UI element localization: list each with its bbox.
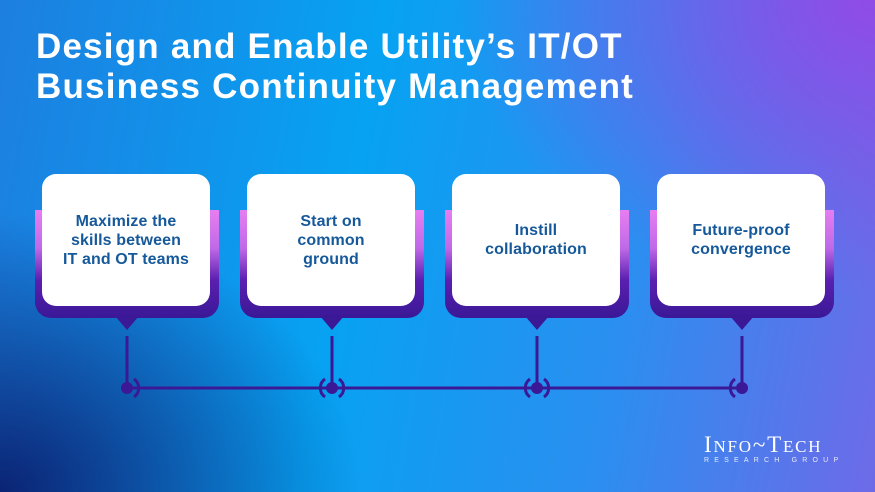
card text 4 [657,174,825,306]
card text 2: ground [303,250,359,268]
card text 1: IT and OT teams [63,250,189,268]
card text 3 [452,174,620,306]
logo: INFO~TECH [704,432,822,457]
logo: RESEARCH GROUP [704,457,843,464]
card 4 [650,174,834,330]
card text 1: Maximize the [76,212,176,230]
card text 4: convergence [691,241,791,258]
card 3 [445,174,629,330]
title: Design and Enable Utility’s IT/OT [36,27,623,66]
title: Business Continuity Management [36,67,634,106]
logo [704,432,843,464]
card 2 [240,174,424,330]
card text 2: common [297,232,365,248]
card text 1 [42,174,210,306]
card text 3: collaboration [485,241,587,258]
card text 2: Start on [300,212,362,230]
card text 1: skills between [71,232,181,248]
title [36,27,634,106]
card text 3: Instill [515,222,557,239]
card text 4: Future-proof [692,222,790,239]
card text 2 [247,174,415,306]
card 1 [35,174,219,330]
